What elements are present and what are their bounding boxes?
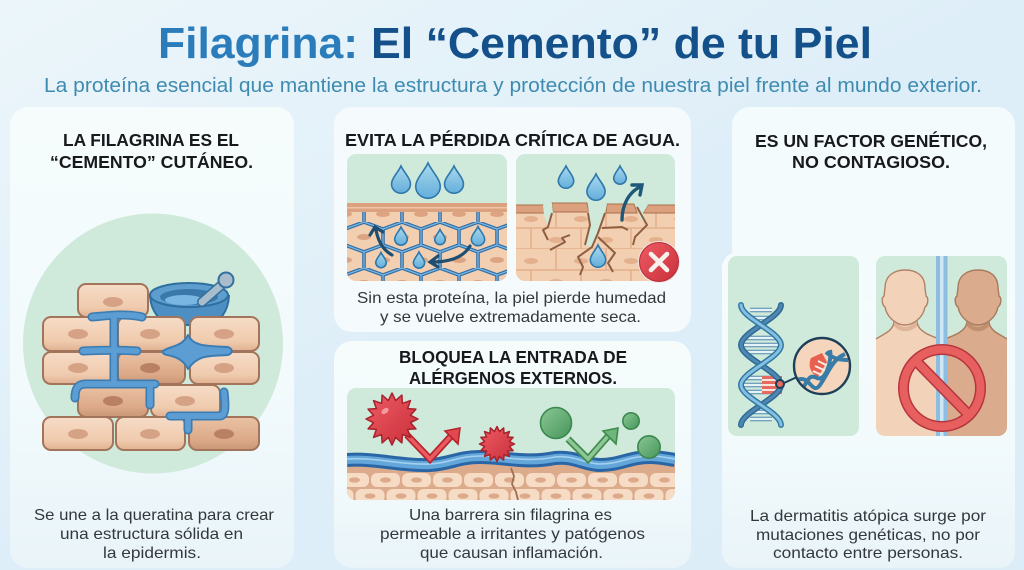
dna rungs — [742, 310, 780, 419]
arrows: retained water — [370, 227, 470, 267]
mutation highlight — [762, 376, 782, 394]
heading: genético: ES UN FACTOR GENÉTICO, — [755, 130, 987, 151]
text: cemento: la epidermis. — [103, 545, 201, 562]
text: cemento: Se une a la queratina para crear — [34, 507, 275, 524]
text: alérgenos: Una barrera sin filagrina es — [409, 507, 612, 524]
heading: genético — [755, 130, 987, 172]
text: agua: Sin esta proteína, la piel pierde humedad — [357, 290, 666, 307]
heading: cemento: “CEMENTO” CUTÁNEO. — [50, 151, 253, 172]
title: Filagrina: — [158, 19, 358, 68]
heading: alérgenos: BLOQUEA LA ENTRADA DE — [399, 347, 627, 367]
text: cemento: una estructura sólida en — [60, 526, 243, 543]
panel: cemento cutáneo — [10, 107, 294, 568]
heading: genético: NO CONTAGIOSO. — [792, 152, 950, 172]
text: agua: y se vuelve extremadamente seca. — [380, 309, 641, 326]
heading: agua: EVITA LA PÉRDIDA CRÍTICA DE AGUA. — [345, 129, 680, 150]
title — [158, 19, 872, 68]
text: agua — [357, 290, 666, 326]
illustration: cracked skin — [514, 154, 677, 282]
magnifier — [776, 338, 850, 394]
icon: water drops — [376, 163, 485, 268]
person left — [876, 269, 936, 436]
bricks — [43, 284, 259, 450]
illustration: healthy skin barrier — [347, 154, 507, 282]
person right — [948, 269, 1007, 436]
panel: pérdida de agua — [334, 107, 691, 332]
red arrow: rebound — [407, 428, 460, 459]
icon: large allergen — [366, 393, 418, 445]
text: alérgenos: que causan inflamación. — [420, 545, 603, 562]
heading: cemento: LA FILAGRINA ES EL — [63, 130, 239, 150]
icon: mortar and pestle — [150, 272, 234, 325]
illustration: brick wall with mortar — [23, 214, 283, 474]
icon: green particles — [540, 408, 660, 458]
brick nuclei — [68, 297, 234, 439]
icon: small allergen — [480, 426, 514, 462]
dna strands — [741, 305, 781, 425]
panel: factor genético — [722, 107, 1015, 568]
subtitle: La proteína esencial que mantiene la estructura y protección de nuestra piel frente al mundo exterior. — [44, 75, 982, 97]
glass divider — [936, 256, 948, 436]
crack wedge — [585, 204, 607, 247]
illustration: no contagion between people — [874, 256, 1009, 440]
icon: red x badge — [638, 241, 680, 283]
green arrow: protected — [568, 428, 618, 459]
cracks — [543, 207, 647, 275]
text: cemento — [34, 507, 275, 562]
text: genético — [750, 508, 987, 562]
panel: alérgenos — [334, 341, 691, 568]
text: alérgenos — [380, 507, 645, 562]
blue mortar — [75, 315, 232, 430]
heading: alérgenos — [399, 347, 627, 388]
icon: escaping water drops — [558, 166, 626, 267]
icon: prohibition sign — [904, 350, 980, 426]
heading: cemento — [50, 130, 253, 172]
illustration: dna mutation — [728, 256, 859, 436]
illustration: skin barrier against allergens — [347, 388, 675, 505]
heading: alérgenos: ALÉRGENOS EXTERNOS. — [409, 367, 617, 388]
skin plates — [514, 203, 677, 213]
text: genético: La dermatitis atópica surge por — [750, 508, 987, 525]
text: genético: contacto entre personas. — [773, 545, 963, 562]
arrow: water escaping — [622, 185, 642, 220]
skin crack — [511, 468, 518, 500]
title: El “Cemento” de tu Piel — [371, 19, 872, 68]
blue barrier wave — [347, 456, 675, 465]
text: genético: mutaciones genéticas, no por — [756, 527, 981, 544]
text: alérgenos: permeable a irritantes y patógenos — [380, 526, 645, 543]
